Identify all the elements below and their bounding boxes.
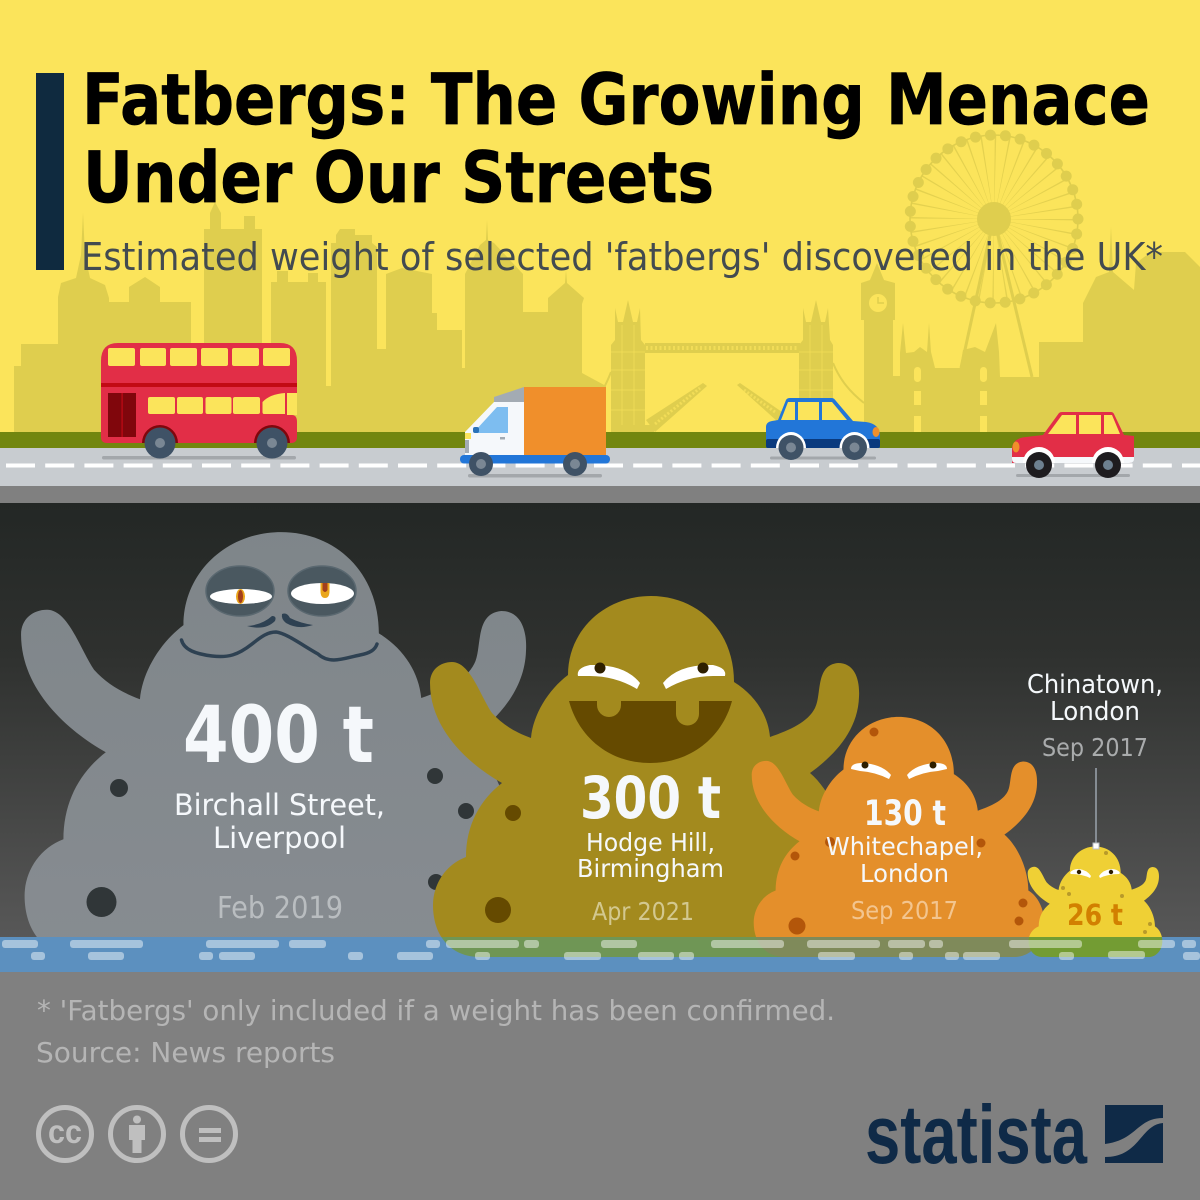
statista logo mark bbox=[1105, 1105, 1163, 1163]
spots: orange fatberg bbox=[788, 728, 1028, 934]
label: Whitechapel, London bbox=[826, 832, 983, 888]
title bbox=[82, 59, 1150, 219]
source: Source: News reports bbox=[36, 1036, 335, 1069]
icon: no derivatives bbox=[182, 1108, 236, 1160]
eyes: grey fatberg bbox=[206, 566, 356, 616]
moustache and mouth: grey fatberg bbox=[182, 614, 377, 660]
water ripples bbox=[2, 940, 1200, 960]
tower and abbey details bbox=[869, 294, 987, 432]
label: Hodge Hill, Birmingham: Birmingham bbox=[577, 854, 724, 883]
panel: footer bbox=[0, 972, 1200, 1200]
label: Birchall Street, Liverpool: Liverpool bbox=[213, 821, 346, 855]
eyes: yellow fatberg bbox=[1070, 869, 1120, 878]
fatberg: 400 t Birchall Street bbox=[21, 532, 539, 957]
fatberg: 300 t Hodge Hill bbox=[430, 596, 870, 957]
vehicle: blue car bbox=[766, 398, 880, 460]
vehicle: delivery truck bbox=[460, 387, 610, 478]
vehicle: red car bbox=[1012, 412, 1134, 478]
tower bridge details bbox=[611, 325, 833, 432]
date: Sep 2017: Sep 2017 bbox=[851, 896, 958, 925]
fatberg: 130 t Whitechapel bbox=[752, 717, 1044, 957]
footnote: * 'Fatbergs' only included if a weight has been confirmed. bbox=[37, 994, 835, 1027]
title accent bar bbox=[36, 73, 64, 270]
spots: grey fatberg bbox=[86, 768, 474, 917]
panel: sky background bbox=[0, 0, 1200, 440]
callout label: Chinatown, London bbox=[1027, 670, 1163, 727]
grass strip bbox=[0, 432, 1200, 448]
label: 130 t: 130 t bbox=[864, 794, 946, 834]
panel: underground bbox=[0, 503, 1200, 940]
label: Birchall Street, Liverpool: Birchall Street, bbox=[174, 788, 385, 822]
mouth: brown fatberg bbox=[569, 701, 732, 763]
date: Feb 2019: Feb 2019 bbox=[217, 891, 343, 926]
London Eye silhouette bbox=[910, 135, 1078, 377]
icon: creative commons: cc bbox=[48, 1113, 82, 1150]
label: Birchall Street, Liverpool bbox=[174, 788, 385, 855]
eyes: brown fatberg bbox=[578, 662, 725, 689]
label: Hodge Hill, Birmingham bbox=[577, 828, 724, 883]
label: 300 t: 300 t bbox=[580, 764, 721, 832]
callout label: Chinatown, London: London bbox=[1050, 697, 1140, 727]
label: Hodge Hill, Birmingham: Hodge Hill, bbox=[586, 828, 715, 857]
fatberg: 26 t Chinatown bbox=[1028, 847, 1162, 957]
fatberg bases in the water bbox=[442, 937, 1162, 957]
city skyline silhouette bbox=[14, 202, 1200, 432]
label: Whitechapel, London: London bbox=[860, 859, 949, 888]
label: Whitechapel, London: Whitechapel, bbox=[826, 832, 983, 861]
sewer water bbox=[0, 937, 1200, 972]
icon: creative commons bbox=[38, 1108, 92, 1160]
icon: attribution bbox=[110, 1108, 164, 1160]
date: Sep 2017 Chinatown: Sep 2017 bbox=[1042, 733, 1148, 762]
spots: yellow fatberg bbox=[1061, 851, 1152, 934]
callout label: Chinatown, London: Chinatown, bbox=[1027, 670, 1163, 700]
eyes: orange fatberg bbox=[851, 762, 947, 779]
label: 400 t: 400 t bbox=[183, 691, 374, 781]
vehicle: red double-decker bus bbox=[101, 343, 297, 460]
road bbox=[0, 448, 1200, 486]
statista wordmark: statista bbox=[865, 1088, 1088, 1181]
date: Apr 2021: Apr 2021 bbox=[592, 897, 694, 926]
callout leader line: Chinatown bbox=[1093, 768, 1099, 849]
label: 26 t: 26 t bbox=[1067, 898, 1123, 932]
title: Under Our Streets bbox=[83, 137, 714, 219]
spots: brown fatberg bbox=[485, 805, 521, 923]
kerb strip bbox=[0, 486, 1200, 503]
